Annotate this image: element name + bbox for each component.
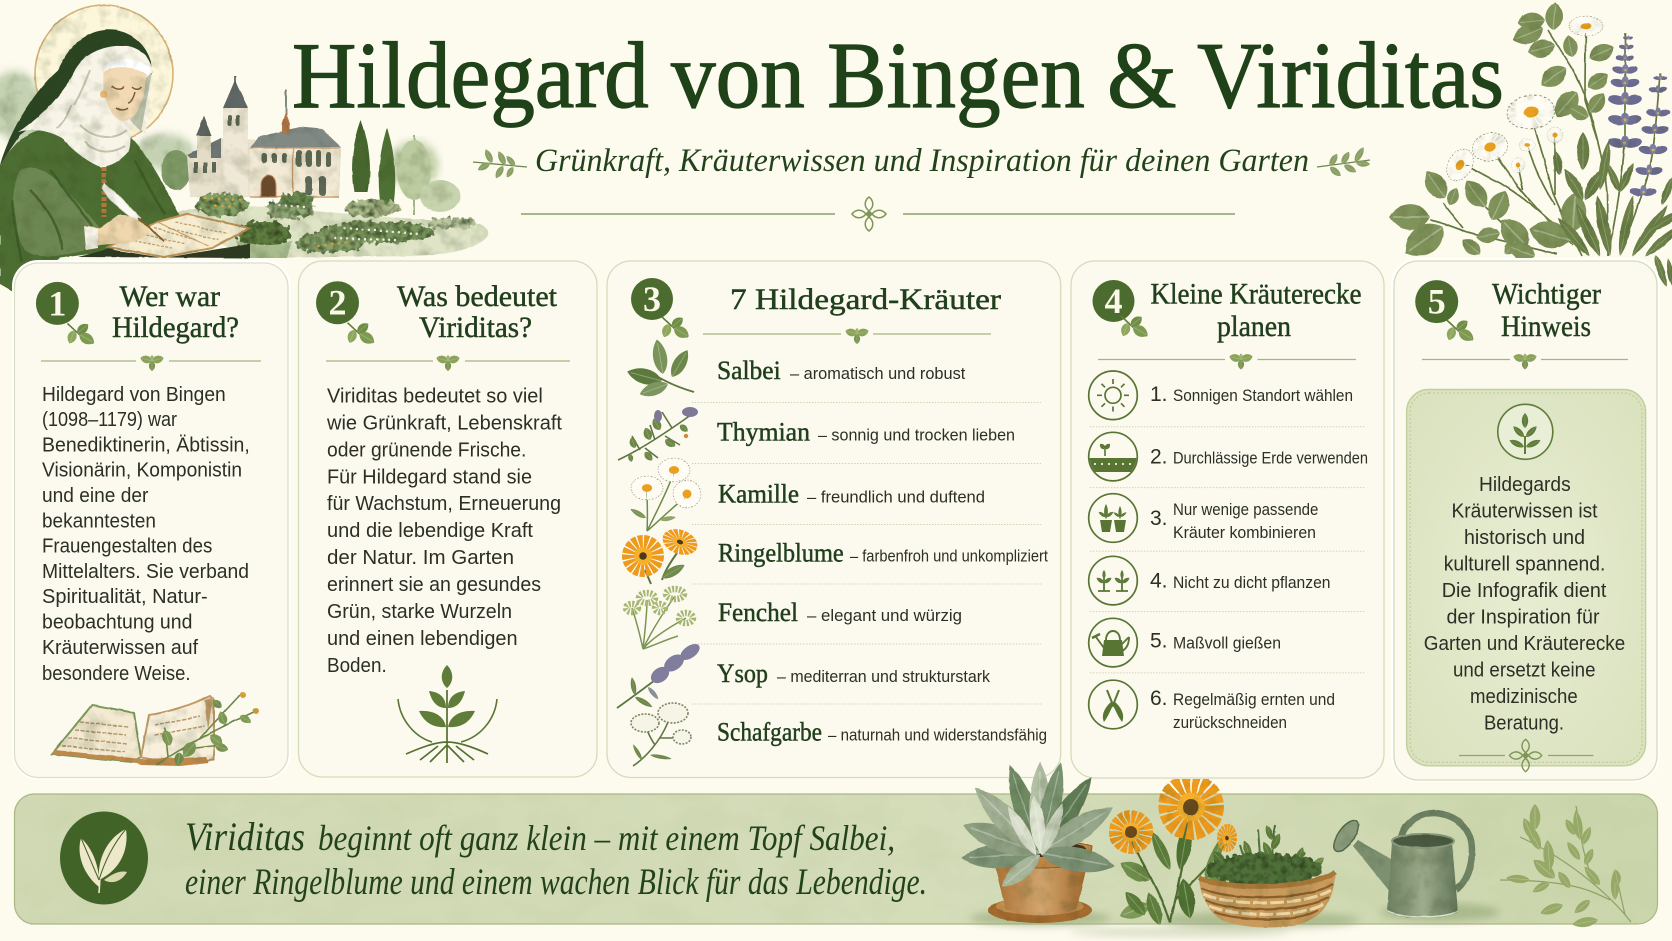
body text: Hildegard von Bingen (42, 384, 226, 406)
note text: kulturell spannend. (1444, 553, 1605, 575)
icon: rosary (102, 167, 106, 217)
row: Ringelblume: – farbenfroh und unkompliziert (850, 548, 1048, 566)
icon: coif (104, 59, 150, 76)
body text: Kräuterwissen auf (42, 637, 198, 659)
icon: writing hand and quill (102, 183, 141, 221)
step 5 (1089, 618, 1281, 667)
body text: oder grünende Frische. (327, 439, 526, 461)
heading: Viriditas? (419, 311, 532, 344)
note text: Hildegards (1479, 474, 1571, 496)
number badge 1 (36, 282, 97, 348)
icon: bouquet leaves (1389, 1, 1617, 265)
icon: robe (0, 128, 180, 292)
number badge 1: 1 (48, 284, 66, 324)
body text: wie Grünkraft, Lebenskraft (326, 412, 562, 434)
icon: fern foliage (1551, 132, 1672, 288)
heading (397, 280, 558, 344)
heading (112, 280, 239, 344)
icon: subtitle sprig left (473, 148, 527, 180)
icon: sage pot (959, 760, 1119, 923)
number badge 4 (1092, 280, 1150, 340)
body text: für Wachstum, Erneuerung (327, 493, 561, 515)
note text (1424, 474, 1625, 734)
step 2: 2. (1150, 446, 1168, 468)
panel: 5 Wichtiger Hinweis (1391, 258, 1660, 782)
row: Kamille: Kamille (718, 479, 799, 508)
body text: Für Hildegard stand sie (327, 466, 532, 488)
icon: yarrow (631, 703, 691, 766)
heading: 7 Hildegard-Kräuter (730, 283, 1001, 316)
icon: calendula (630, 531, 693, 584)
icon: garden beds (196, 192, 476, 253)
illustration: Hildegard writing with monastery garden (0, 5, 488, 292)
icon: watering can (1089, 618, 1137, 667)
icon: marigold plant (1113, 786, 1233, 927)
note text: Beratung. (1484, 712, 1564, 734)
icon: face (103, 66, 146, 121)
title: Hildegard von Bingen & Viriditas (292, 24, 1504, 128)
step 3: 3. (1150, 507, 1168, 530)
icon: two pots (1089, 494, 1137, 542)
body text: erinnert sie an gesundes (327, 574, 541, 596)
step 6 (1089, 680, 1335, 732)
step 2 (1088, 432, 1368, 481)
icon: sage (625, 338, 694, 400)
note text: Garten und Kräuterecke (1424, 633, 1625, 655)
body text: Grün, starke Wurzeln (327, 601, 512, 623)
icon: plant with roots (398, 665, 497, 763)
icon: soil (1088, 432, 1138, 481)
step 1 (1089, 371, 1353, 420)
banner quote: einer Ringelblume und einem wachen Blick für das Lebendige. (185, 862, 927, 903)
step 6: 6. (1150, 687, 1168, 710)
icon: cypress and garden trees (161, 120, 460, 215)
row: Ysop: – mediterran und strukturstark (777, 668, 991, 686)
row: Schafgarbe (631, 703, 1047, 766)
body text: Frauengestalten des (42, 536, 212, 558)
note text: und ersetzt keine (1453, 659, 1596, 681)
step 4: 4. (1150, 570, 1168, 592)
heading: Was bedeutet (397, 280, 558, 313)
step 3: Kräuter kombinieren (1173, 524, 1316, 542)
number badge 5: 5 (1428, 282, 1446, 322)
row: Salbei (625, 338, 966, 400)
panel: 1 Wer war Hildegard (12, 260, 291, 780)
number badge 2: 2 (328, 282, 346, 322)
body text: Viriditas bedeutet so viel (327, 386, 543, 408)
body text: Benediktinerin, Äbtissin, (42, 434, 250, 456)
step 5: 5. (1150, 630, 1168, 653)
heading: planen (1217, 310, 1291, 343)
callout box (1407, 390, 1646, 772)
body text: Visionärin, Komponistin (42, 460, 242, 482)
body text: Spiritualität, Natur- (42, 586, 208, 608)
step 6: Regelmäßig ernten und (1173, 691, 1335, 709)
icon: thyme (618, 407, 698, 463)
body text: beobachtung und (42, 612, 192, 634)
row: Thymian: – sonnig und trocken lieben (818, 426, 1015, 444)
icon: lavender spikes (1607, 36, 1670, 197)
icon: garden flowers (205, 198, 420, 246)
icon: distant trees (0, 71, 193, 170)
row: Salbei: – aromatisch und robust (790, 365, 966, 383)
note text: historisch und (1464, 527, 1585, 549)
row: Salbei: Salbei (717, 356, 781, 385)
body text: und die lebendige Kraft (327, 520, 533, 542)
body text: und einen lebendigen (327, 628, 518, 650)
row: Ringelblume (630, 531, 1048, 584)
row: Fenchel: Fenchel (718, 598, 798, 627)
icon: herb bowl (236, 240, 292, 258)
icon: spaced seedlings (1089, 556, 1137, 605)
icon: monastery (187, 76, 341, 198)
icon: subtitle sprig right (1317, 146, 1370, 178)
note text: der Inspiration für (1446, 606, 1600, 628)
number badge 5 (1415, 280, 1476, 344)
icon: sun (1089, 371, 1137, 420)
heading (1492, 277, 1601, 343)
icon: open book (78, 244, 250, 258)
banner quote: beginnt oft ganz klein – mit einem Topf Salbei, (318, 818, 895, 858)
body text (326, 386, 562, 677)
panel: 2 Was bedeutet Viriditas (298, 261, 597, 777)
banner quote (185, 814, 927, 903)
icon: bouquet stems (1430, 30, 1660, 256)
row: Fenchel (626, 589, 962, 649)
body text: Boden. (327, 655, 387, 677)
note text: Kräuterwissen ist (1452, 500, 1598, 522)
step 3 (1089, 494, 1318, 542)
banner quote: Viriditas (185, 814, 305, 859)
icon: chamomile (629, 458, 701, 531)
step 1: 1. (1150, 383, 1168, 406)
heading (1150, 277, 1362, 343)
body text: Mittelalters. Sie verband (42, 561, 249, 583)
note text: Die Infografik dient (1442, 580, 1607, 602)
icon: plant in circle (1498, 404, 1553, 459)
note text: medizinische (1470, 686, 1578, 708)
body text: (1098–1179) war (42, 409, 177, 431)
illustration: herb bouquet top right (1389, 1, 1672, 288)
heading: Wer war (120, 280, 220, 313)
icon: box ornament (1509, 739, 1542, 772)
icon: chamomile flowers (1441, 16, 1603, 185)
row: Schafgarbe: – naturnah und widerstandsfähig (828, 727, 1047, 745)
icon: golden halo (35, 5, 173, 143)
row: Kamille (629, 458, 985, 531)
garden ground wash (165, 206, 488, 258)
icon: herb basket (1199, 824, 1335, 927)
icon: decorative branch (1500, 804, 1631, 929)
step 3: Nur wenige passende (1173, 501, 1318, 519)
heading: Hildegard? (112, 311, 239, 344)
row: Kamille: – freundlich und duftend (807, 488, 985, 506)
panel: 4 Kleine Kräuterecke planen (1071, 261, 1384, 778)
heading: Kleine Kräuterecke (1150, 277, 1362, 310)
step 1: Sonnigen Standort wählen (1173, 387, 1353, 405)
step 4: Nicht zu dicht pflanzen (1173, 574, 1330, 592)
step 4 (1089, 556, 1330, 605)
row: Fenchel: – elegant und würzig (807, 607, 962, 625)
row: Thymian: Thymian (717, 417, 810, 446)
icon: open book with herb (52, 692, 259, 767)
panel: 3 7 Hildegard-Kräuter (607, 261, 1061, 778)
icon: dark veil (0, 30, 152, 165)
number badge 2 (316, 281, 377, 347)
row: Ysop: Ysop (717, 659, 768, 688)
icon: leaf medallion (60, 812, 148, 904)
bottom banner (14, 760, 1658, 937)
body text: bekanntesten (42, 510, 156, 532)
body text (42, 384, 250, 685)
step 5: Maßvoll gießen (1173, 634, 1281, 652)
icon: fennel (626, 589, 693, 649)
heading: Hinweis (1501, 310, 1591, 343)
icon: watering can (1329, 813, 1472, 918)
body text: der Natur. Im Garten (327, 547, 514, 569)
number badge 3 (631, 278, 691, 341)
row: Ringelblume: Ringelblume (718, 539, 844, 568)
row: Thymian (618, 407, 1015, 463)
icon: white veil and wimple (18, 46, 152, 166)
subtitle: Grünkraft, Kräuterwissen und Inspiration für deinen Garten (535, 143, 1309, 179)
icon: title ornament (852, 197, 886, 231)
icon: hyssop (617, 641, 702, 709)
step 6: zurückschneiden (1173, 714, 1287, 732)
body text: und eine der (42, 485, 149, 507)
number badge 3: 3 (643, 279, 661, 319)
ground shadows (970, 903, 1500, 937)
body text: besondere Weise. (42, 663, 190, 685)
number badge 4: 4 (1104, 281, 1122, 321)
row: Schafgarbe: Schafgarbe (717, 718, 822, 747)
row: Ysop (617, 641, 991, 709)
icon: shears (1089, 680, 1137, 729)
heading: Wichtiger (1492, 277, 1601, 310)
step 2: Durchlässige Erde verwenden (1173, 450, 1368, 468)
